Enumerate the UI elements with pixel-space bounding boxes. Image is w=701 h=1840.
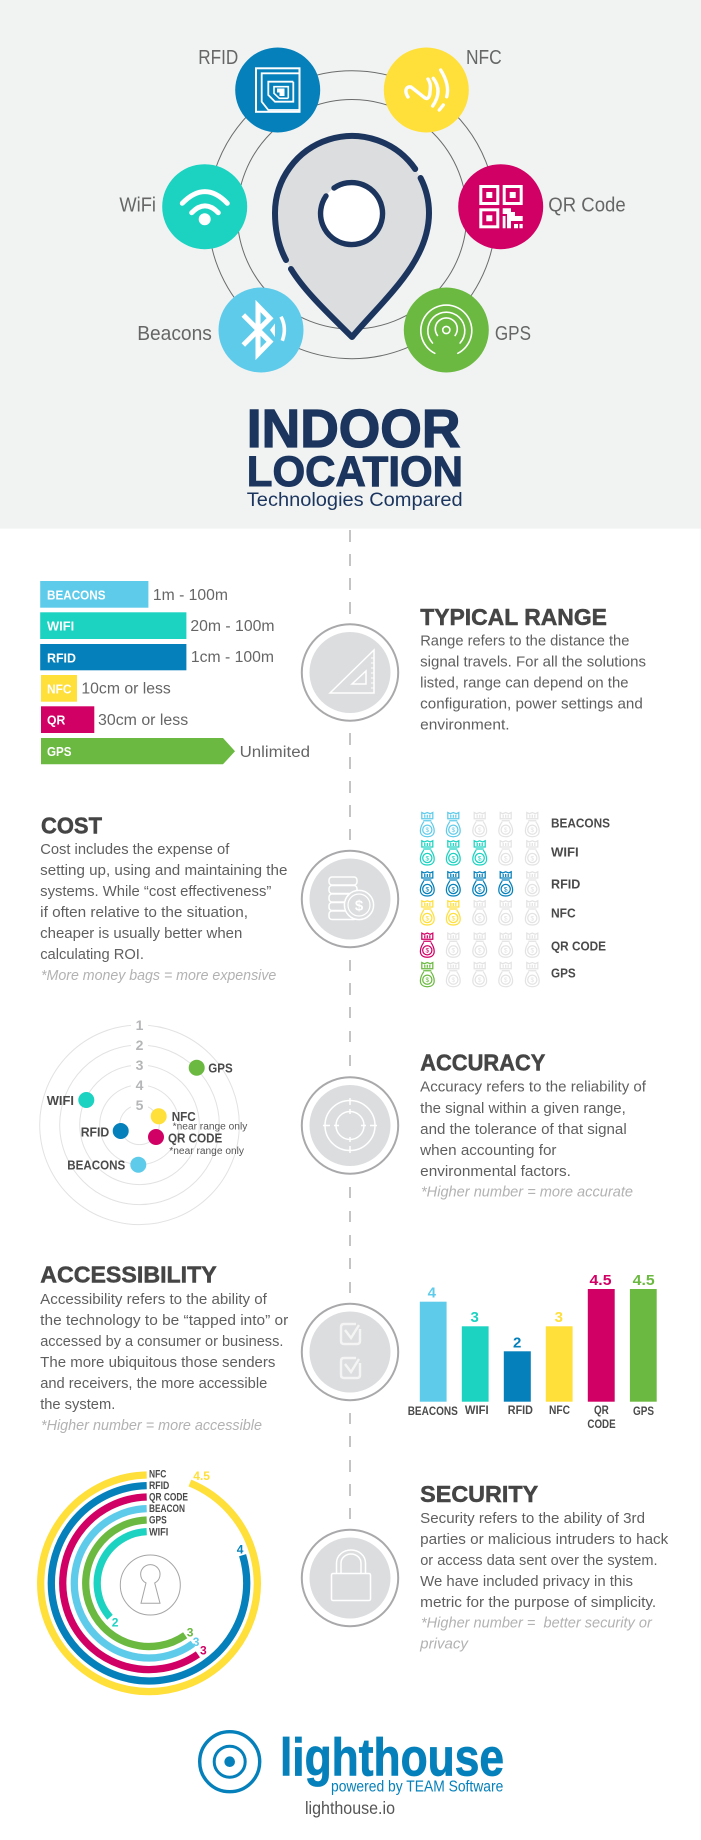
- icon: WiFi: [162, 164, 247, 249]
- chart: security radial bars: 4: [237, 1542, 244, 1556]
- chart: range bars: 20m - 100m: [190, 618, 274, 635]
- chart: range bars: 10cm or less: [81, 681, 171, 698]
- text: cost description: [40, 842, 287, 984]
- chart: security radial bars: WIFI: [149, 1527, 168, 1539]
- text: accuracy description: [419, 1080, 647, 1201]
- title: Technologies Compared: [247, 490, 463, 511]
- chart: security radial bars: 2: [112, 1616, 119, 1630]
- chart: accessibility bars: 4.5: [633, 1272, 655, 1289]
- chart: money bag ratings: [420, 812, 610, 987]
- chart: accuracy radar: 2: [136, 1037, 144, 1053]
- icon: checklist badge: [302, 1304, 398, 1400]
- text: security description: Security refers to the ability of 3rd: [420, 1511, 645, 1527]
- icon: coins badge: $: [355, 898, 364, 914]
- title: [247, 400, 463, 511]
- labels: technology names: WiFi: [119, 194, 156, 216]
- chart: security radial bars: [41, 1468, 257, 1692]
- labels: technology names: QR Code: [548, 194, 626, 216]
- text: security description: or access data sent over the system.: [420, 1553, 658, 1569]
- row: wifi: [420, 841, 579, 865]
- chart: range bars: 1cm - 100m: [191, 649, 274, 666]
- labels: technology names: NFC: [466, 47, 502, 69]
- icon: NFC: [384, 48, 469, 132]
- chart: accessibility bars: 4: [428, 1284, 437, 1301]
- text: range description: environment.: [420, 718, 510, 734]
- panel: accessibility: [40, 1262, 657, 1434]
- chart: range bars: BEACONS: [47, 587, 106, 602]
- chart: range bars: 1m - 100m: [153, 587, 228, 604]
- icon: lighthouse target: [200, 1732, 260, 1792]
- chart: accuracy radar: *near range only: [173, 1121, 247, 1132]
- dashed timeline: [349, 530, 351, 1519]
- text: range description: signal travels. For all the solutions: [420, 655, 646, 671]
- text: accuracy description: Accuracy refers to the reliability of: [420, 1080, 647, 1096]
- icon: target badge: [302, 1077, 398, 1174]
- text: cost description: calculating ROI.: [40, 947, 144, 963]
- footer: lighthouse logo: [200, 1729, 504, 1818]
- text: security description: parties or malicious intruders to hack: [420, 1532, 669, 1548]
- chart: accessibility bars: 3: [471, 1309, 479, 1326]
- chart: accuracy radar: GPS: [208, 1061, 233, 1076]
- chart: range bars: Unlimited: [240, 744, 310, 761]
- wordmark: lighthouse: [280, 1729, 504, 1788]
- chart: security radial bars: QR CODE: [149, 1491, 188, 1503]
- text: security description: *Higher number = better security or: [421, 1616, 653, 1632]
- labels: technology names: Beacons: [137, 323, 212, 345]
- chart: security radial bars: 3: [187, 1626, 194, 1640]
- text: accessibility description: the system.: [40, 1397, 115, 1413]
- panel: typical range: [40, 581, 646, 764]
- row: qr code: [420, 933, 606, 957]
- icon: location pin: [275, 136, 429, 337]
- chart: accessibility bars: 4.5: [590, 1272, 612, 1289]
- chart: accessibility bars: 2: [513, 1334, 521, 1351]
- icon: keyhole: [120, 1555, 180, 1615]
- chart: range bars: 30cm or less: [98, 712, 188, 729]
- chart: security radial bars: NFC: [149, 1468, 166, 1480]
- orbit rings: [208, 71, 496, 359]
- chart: security radial bars: 3: [200, 1643, 207, 1657]
- labels: technology names: [119, 47, 626, 345]
- title: LOCATION: [247, 449, 463, 496]
- icon: coins badge: [302, 851, 398, 947]
- text: cost description: *More money bags = more expensive: [41, 968, 276, 984]
- chart: accuracy radar: NFC: [172, 1109, 196, 1124]
- row: beacons: [420, 812, 610, 837]
- icon: QR code: [458, 164, 543, 249]
- heading: cost: COST: [41, 812, 102, 838]
- chart: accuracy radar: [40, 1017, 247, 1225]
- chart: accessibility bars: 3: [555, 1309, 563, 1326]
- chart: accessibility bars: CODE: [587, 1417, 616, 1431]
- chart: accessibility bars: NFC: [549, 1403, 570, 1417]
- chart: accessibility bars: GPS: [633, 1404, 654, 1418]
- chart: range bars: NFC: [47, 681, 72, 696]
- chart: accessibility bars: [408, 1272, 657, 1431]
- chart: accuracy radar: WIFI: [47, 1093, 74, 1108]
- icon: padlock badge: [302, 1530, 398, 1626]
- chart: accuracy radar: 4: [136, 1077, 144, 1093]
- chart: security radial bars: GPS: [149, 1514, 167, 1526]
- chart: accessibility bars: BEACONS: [408, 1404, 458, 1418]
- panel: accuracy: [40, 1017, 647, 1225]
- row: wifi: WIFI: [551, 845, 579, 860]
- chart: accuracy radar: RFID: [81, 1124, 109, 1139]
- panel: cost: [40, 812, 610, 987]
- chart: accuracy radar: BEACONS: [67, 1157, 126, 1172]
- icon: ruler badge: [302, 624, 398, 721]
- text: range description: configuration, power settings and: [420, 697, 643, 713]
- text: accessibility description: *Higher number = more accessible: [41, 1418, 262, 1434]
- text: accessibility description: accessed by a consumer or business.: [40, 1334, 283, 1350]
- chart: accessibility bars: QR: [594, 1403, 609, 1417]
- text: cost description: if often relative to the situation,: [40, 905, 248, 921]
- text: accuracy description: when accounting for: [419, 1143, 557, 1159]
- icon: Beacons bluetooth: [218, 288, 304, 372]
- text: cost description: systems. While “cost effectiveness”: [40, 884, 271, 900]
- url: lighthouse.io: [305, 1798, 395, 1818]
- text: security description: privacy: [419, 1637, 470, 1653]
- panel: security: [41, 1468, 669, 1692]
- row: nfc: NFC: [551, 905, 576, 920]
- icon: RFID: [235, 48, 320, 132]
- chart: range bars: QR: [47, 712, 66, 728]
- chart: security radial bars: 3: [193, 1635, 200, 1649]
- chart: security radial bars: 4.5: [193, 1469, 210, 1483]
- text: accessibility description: the technology to be “tapped into” or: [40, 1313, 288, 1329]
- hero background: [0, 0, 701, 529]
- text: range description: Range refers to the distance the: [420, 634, 629, 650]
- text: accuracy description: environmental factors.: [420, 1164, 571, 1180]
- text: security description: We have included privacy in this: [420, 1574, 633, 1590]
- row: rfid: RFID: [551, 876, 580, 891]
- row: beacons: BEACONS: [551, 815, 610, 830]
- text: accessibility description: [40, 1292, 288, 1434]
- title: INDOOR: [247, 400, 460, 459]
- chart: security radial bars: BEACON: [149, 1503, 185, 1515]
- hero: technology ring diagram: [119, 47, 626, 372]
- row: qr code: QR CODE: [551, 938, 606, 953]
- text: range description: [420, 634, 646, 734]
- row: gps: GPS: [551, 965, 576, 980]
- chart: accuracy radar: 3: [136, 1057, 144, 1073]
- labels: technology names: RFID: [198, 47, 238, 69]
- chart: range bars: RFID: [47, 650, 76, 665]
- text: accessibility description: The more ubiquitous those senders: [40, 1355, 275, 1371]
- heading: accuracy: ACCURACY: [420, 1050, 546, 1076]
- chart: accuracy radar: *near range only: [169, 1146, 244, 1157]
- chart: accessibility bars: RFID: [508, 1403, 533, 1417]
- row: nfc: [420, 901, 576, 925]
- text: cost description: Cost includes the expense of: [40, 842, 230, 858]
- tagline: powered by TEAM Software: [331, 1779, 503, 1796]
- text: accessibility description: Accessibility refers to the ability of: [40, 1292, 268, 1308]
- text: security description: metric for the purpose of simplicity.: [420, 1595, 656, 1611]
- heading: accessibility: ACCESSIBILITY: [40, 1262, 217, 1288]
- text: accuracy description: the signal within a given range,: [420, 1101, 626, 1117]
- text: security description: [419, 1511, 669, 1653]
- chart: range bars: WIFI: [47, 618, 74, 633]
- text: accuracy description: and the tolerance of that signal: [420, 1122, 627, 1138]
- chart: range bars: [40, 581, 310, 764]
- text: range description: listed, range can depend on the: [420, 676, 628, 692]
- chart: accuracy radar: 1: [136, 1017, 144, 1033]
- text: cost description: cheaper is usually better when: [40, 926, 242, 942]
- chart: range bars: GPS: [47, 744, 72, 759]
- text: accuracy description: *Higher number = more accurate: [421, 1185, 633, 1201]
- labels: technology names: GPS: [495, 323, 531, 345]
- chart: accuracy radar: QR CODE: [168, 1130, 223, 1145]
- text: accessibility description: and receivers, the more accessible: [40, 1376, 267, 1392]
- chart: accessibility bars: WIFI: [465, 1403, 489, 1417]
- icon: GPS: [404, 288, 489, 372]
- heading: typical range: TYPICAL RANGE: [420, 604, 607, 630]
- row: rfid: [420, 872, 580, 896]
- heading: security: SECURITY: [420, 1481, 539, 1507]
- chart: accuracy radar: 5: [136, 1097, 144, 1113]
- row: gps: [420, 962, 576, 987]
- text: cost description: setting up, using and maintaining the: [40, 863, 287, 879]
- chart: security radial bars: RFID: [149, 1480, 169, 1492]
